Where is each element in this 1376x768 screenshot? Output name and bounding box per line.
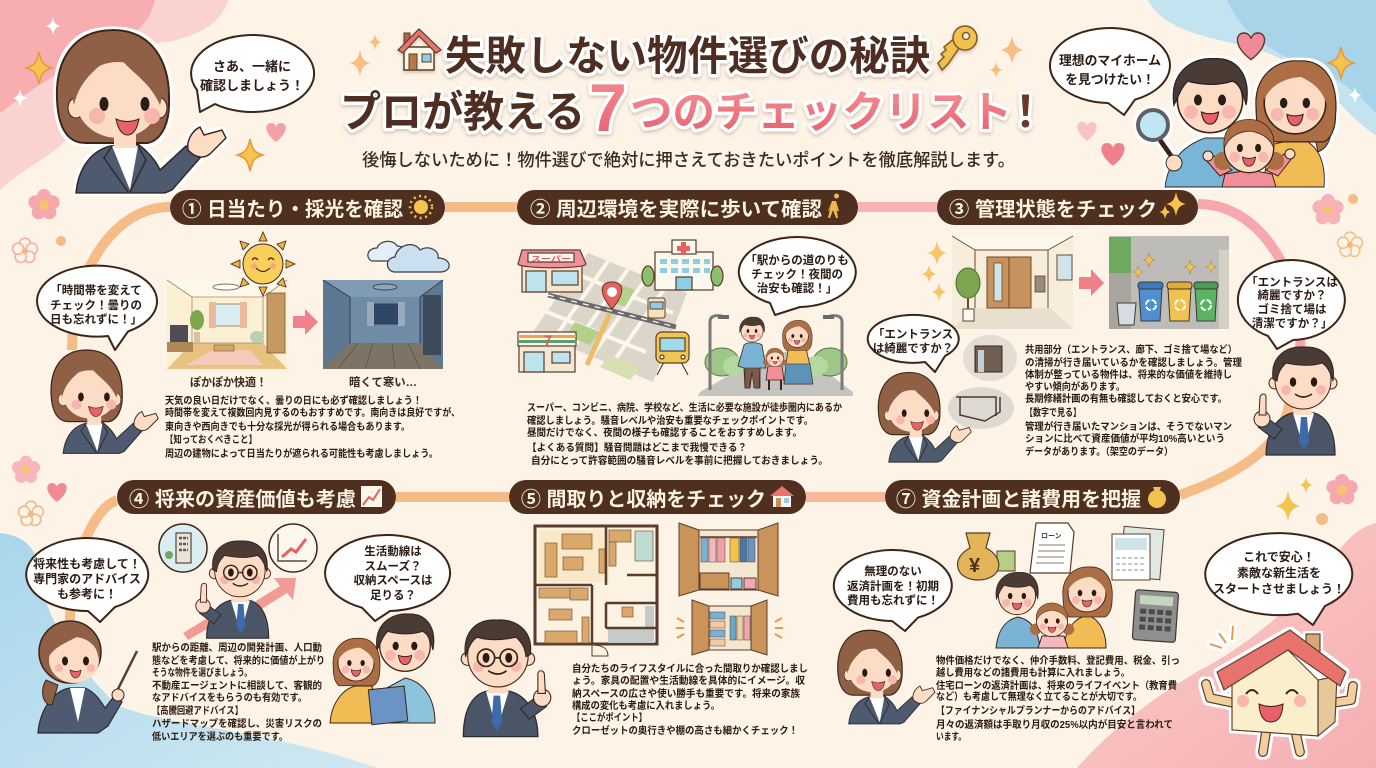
speech bubble: mascot: これで安心！ [1243, 549, 1315, 564]
icon: chart circle [269, 524, 317, 572]
speech bubble right: 「エントランスは [1246, 276, 1338, 289]
character: teacher woman with pointer [38, 621, 137, 733]
character: family with magnifier [1138, 59, 1336, 187]
text block: 時間帯を変えて複数回内見するのもおすすめです。南向きは良好ですが、 [165, 406, 460, 419]
speech bubble: チェック！曇りの [50, 299, 142, 312]
icon: building circle [159, 524, 207, 572]
heading [170, 190, 445, 225]
text block: 管理が行き届いたマンションは、そうでないマン [1025, 420, 1232, 433]
heading: ⑦ 資金計画と諸費用を把握 [896, 488, 1141, 511]
speech bubble right: スムーズ？ [365, 559, 421, 573]
speech bubble: 無理のない [864, 564, 922, 578]
speech bubble: host: さあ、一緒に [213, 59, 291, 74]
text block: やすい傾向があります。 [1025, 380, 1125, 393]
text block: 低いエリアを選ぶのも重要です。 [152, 730, 288, 743]
speech bubble: 治安も確認！」 [757, 281, 837, 295]
text block: データがあります。（架空のデータ） [1025, 445, 1173, 458]
illustration: closet open small [676, 600, 783, 655]
speech bubble left: も参考に！ [57, 586, 117, 601]
heading [517, 190, 858, 225]
icon: convenience store: 7 [544, 332, 552, 348]
text block: 体制が整っている物件は、将来的な価値を維持し [1025, 368, 1232, 381]
text block: など）も考慮して無理なく立てることが大切です。 [936, 690, 1142, 703]
text block [165, 394, 460, 460]
illustration: floor plan [535, 526, 657, 656]
text block: 確認しましょう。騒音レベルや治安も重要なチェックポイントです。 [527, 414, 813, 427]
text block: なアドバイスをもらうのも有効です。 [152, 691, 307, 704]
speech bubble: 日も忘れずに！」 [50, 312, 142, 326]
heading [117, 480, 396, 514]
speech bubble left: 「エントランス [873, 328, 953, 341]
speech bubble: family: を見つけたい！ [1065, 72, 1155, 87]
text block: 不動産エージェントに相談して、客観的 [152, 679, 322, 692]
background blob: bottom-left blue [0, 533, 377, 768]
speech bubble right: 清潔ですか？」 [1252, 316, 1332, 330]
character: advisor woman [878, 372, 971, 462]
text block [152, 641, 325, 743]
text block: 天気の良い日だけでなく、曇りの日にも必ず確認しましょう！ [165, 394, 422, 407]
text block: 態などを考慮して、将来的に価値が上がり [152, 654, 325, 667]
text block: います。 [936, 731, 966, 743]
title highlight: つのチェックリスト [630, 89, 1012, 137]
heading [937, 190, 1198, 225]
text block: 月々の返済額は手取り月収の25%以内が目安と言われて [936, 718, 1173, 731]
character: advisor woman [838, 630, 935, 724]
text block: 【数字で見る】 [1025, 406, 1081, 419]
text block: 東向きや西向きでも十分な採光が得られる場合もあります。 [165, 420, 410, 433]
icon: yen bag: ¥ [969, 555, 981, 577]
speech bubble: mascot: 素敵な新生活を [1237, 565, 1321, 580]
section 7: finance [834, 480, 1180, 743]
illustration: entrance [952, 236, 1073, 329]
speech bubble left [26, 538, 148, 622]
text block: 【知っておくべきこと】 [165, 433, 257, 446]
sparkles [922, 241, 947, 301]
caption: dark room: 暗くて寒い… [349, 375, 417, 389]
text block: ションに比べて資産価値が平均10%高いという [1025, 432, 1225, 445]
decorative sparkles, hearts and flowers [12, 17, 1362, 525]
section 3: management [868, 190, 1345, 462]
character: expert man with glasses [196, 541, 270, 638]
arrow [1079, 269, 1104, 296]
heading [509, 480, 806, 514]
icon: supermarket: スーパー [531, 255, 571, 263]
text block: 構成の変化も考慮に入れましょう。 [572, 699, 720, 712]
character: expert man [461, 620, 551, 737]
speech bubble right [1238, 260, 1345, 349]
text block [936, 654, 1180, 743]
speech bubble: mascot: スタートさせましょう！ [1213, 582, 1345, 596]
text block: ハザードマップを確認し、災害リスクの [152, 717, 322, 730]
character: family [996, 567, 1112, 648]
text block: 自分たちのライフスタイルに合った間取りか確認しまし [572, 662, 808, 675]
speech bubble: 「駅からの道のりも [745, 253, 849, 267]
speech bubble left: 専門家のアドバイス [33, 571, 141, 586]
text block: 自分にとって許容範囲の騒音レベルを事前に把握しておきましょう。 [531, 454, 828, 467]
text block: 越し費用などの諸費用も計算に入れましょう。 [936, 666, 1130, 679]
arrow [293, 309, 318, 335]
text block: 納スペースの広さや使い勝手も重要です。将来の家族 [572, 687, 800, 700]
speech bubble: host [191, 35, 314, 112]
speech bubble: 費用も忘れずに！ [847, 593, 939, 607]
illustration: smiling sun [231, 232, 295, 296]
background blob: top-left pink [0, 0, 228, 190]
title exclamation: ！ [1004, 89, 1047, 137]
title line 1: 失敗しない物件選びの秘訣 [445, 33, 930, 79]
icon: yen bag [958, 533, 1015, 580]
section 2: neighbourhood [517, 190, 858, 467]
text block: そうな物件を選びましょう。 [152, 666, 252, 679]
heading [885, 480, 1180, 514]
text block: 住宅ローンの返済計画は、将来のライフイベント（教育費 [936, 679, 1177, 692]
text block [1025, 343, 1242, 458]
heading: ② 周辺環境を実際に歩いて確認 [530, 198, 822, 221]
text block: 【よくある質問】騒音問題はどこまで我慢できる？ [527, 441, 747, 454]
illustration: recycling bins [1109, 236, 1229, 329]
speech bubble left [868, 315, 959, 372]
caption: bright room: ぽかぽか快適！ [190, 375, 267, 389]
speech bubble: 「時間帯を変えて [50, 283, 142, 297]
icon: key [938, 26, 977, 70]
section 1: sunlight [37, 190, 460, 460]
text block: 物件価格だけでなく、仲介手数料、登記費用、税金、引っ [936, 654, 1180, 667]
speech bubble: host: 確認しましょう！ [200, 78, 304, 93]
icon: bus [648, 298, 665, 318]
text block: ょう。家具の配置や生活動線を具体的にイメージ。収 [572, 674, 805, 687]
character: advisor woman [51, 350, 158, 453]
icon: loan document [1030, 523, 1074, 573]
section 4: asset value [26, 480, 450, 743]
speech bubble: チェック！夜間の [751, 267, 843, 281]
text block: 昼間だけでなく、夜間の様子も確認することをおすすめします。 [527, 426, 802, 439]
heading: ⑤ 間取りと収納をチェック [521, 488, 766, 511]
speech bubble right: 足りる？ [370, 589, 416, 602]
speech bubble [37, 266, 157, 350]
speech bubble: family [1050, 28, 1170, 115]
text block: 【高騰回避アドバイス】 [152, 704, 243, 717]
text block: 周辺の建物によって日当たりが遮られる可能性も考慮しましょう。 [165, 447, 438, 460]
route path [70, 204, 1300, 620]
mascot: smiling house [1206, 626, 1353, 752]
subtitle: 後悔しないために！物件選びで絶対に押さえておきたいポイントを徹底解説します。 [362, 150, 1015, 170]
text block: 長期修繕計画の有無も確認しておくと安心です。 [1025, 392, 1227, 405]
title [340, 26, 1047, 146]
speech bubble: family: 理想のマイホーム [1059, 53, 1161, 68]
character: host woman [57, 30, 226, 193]
icon: supermarket [518, 250, 586, 292]
icon: hospital [642, 240, 723, 290]
illustration: clouds [368, 241, 449, 272]
icon circles: corridor and rubbish area [948, 335, 1017, 429]
speech bubble [834, 550, 952, 631]
background blob: bottom-right pink [1077, 523, 1376, 768]
speech bubble right: 収納スペースは [353, 573, 433, 587]
heading: ③ 管理状態をチェック [949, 198, 1157, 221]
text block: の清掃が行き届いているかを確認しましょう。管理 [1025, 356, 1242, 369]
speech bubble right: 生活動線は [364, 544, 422, 558]
text block: クローゼットの奥行きや棚の高さも細かくチェック！ [572, 724, 798, 737]
text block [527, 401, 842, 467]
section 5: floor plan and storage [461, 480, 808, 737]
text block [572, 662, 808, 737]
speech bubble left: 将来性も考慮して！ [33, 556, 141, 571]
text block: 【ファイナンシャルプランナーからのアドバイス】 [936, 705, 1140, 717]
heading: ④ 将来の資産価値も考慮 [129, 488, 356, 511]
illustration: bright room [167, 280, 287, 369]
heading: ① 日当たり・採光を確認 [182, 198, 403, 221]
icon: calculator [1132, 590, 1179, 642]
speech bubble: 返済計画を！初期 [847, 579, 939, 593]
character: advisor man [1254, 347, 1337, 455]
icon: train [656, 332, 689, 375]
text block: 共用部分（エントランス、廊下、ゴミ捨て場など） [1025, 343, 1237, 356]
speech bubble [739, 237, 856, 315]
speech bubble right: 綺麗ですか？ [1258, 288, 1326, 302]
speech bubble right [325, 535, 450, 621]
speech bubble: mascot [1205, 533, 1352, 625]
character: couple with clipboard [330, 614, 435, 725]
icon: papers [1112, 526, 1164, 580]
text block: 【ここがポイント】 [572, 711, 647, 724]
title highlight 7: 7 [589, 70, 627, 146]
text block: 駅からの距離、周辺の開発計画、人口動 [152, 641, 322, 654]
icon: convenience store [518, 332, 576, 372]
illustration: rising arrow [183, 578, 296, 640]
icon: loan document: ローン [1041, 532, 1062, 540]
speech bubble left: は綺麗ですか？ [873, 341, 953, 355]
illustration: dark room [323, 280, 443, 369]
illustration: map [533, 253, 687, 382]
background blob: top-right blue [1148, 0, 1376, 135]
speech bubble right: ゴミ捨て場は [1258, 302, 1327, 316]
illustration: family walking [698, 315, 853, 396]
text block: スーパー、コンビニ、病院、学校など、生活に必要な施設が徒歩圏内にあるか [527, 401, 842, 414]
illustration: closet open large [679, 523, 778, 596]
title line 2: プロが教える [340, 89, 585, 137]
icon: house [398, 29, 441, 70]
